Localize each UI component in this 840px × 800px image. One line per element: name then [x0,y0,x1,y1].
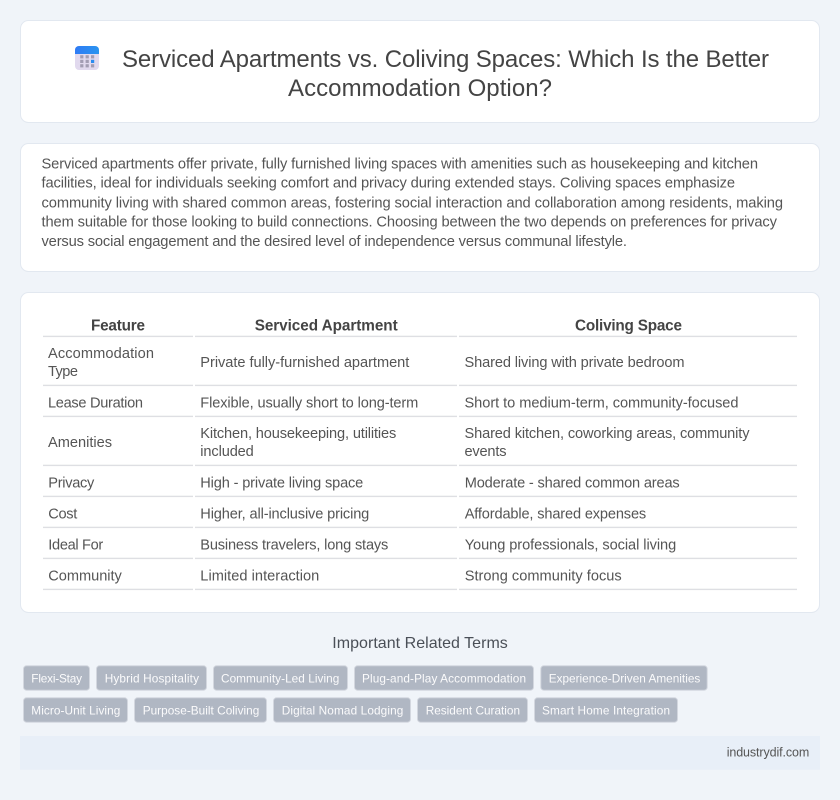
table row: community [43,568,797,590]
tag: Flexi-Stay: Flexi-Stay [31,671,82,685]
title: Serviced Apartments vs. Coliving Spaces: Which Is the Better [122,46,769,73]
footer: industrydif.com [727,746,809,760]
tag: Community-Led Living [214,666,348,690]
icon: calendar [75,46,99,70]
table row: amenities: Amenities [48,435,112,451]
tag: Experience-Driven Amenities [541,666,707,690]
table row: privacy [43,475,797,497]
tag: Hybrid Hospitality: Hybrid Hospitality [105,671,199,685]
table row: amenities: Kitchen, housekeeping, utilities [200,426,396,442]
footer [20,736,820,770]
tag: Resident Curation: Resident Curation [426,703,520,717]
tag: Digital Nomad Lodging [274,698,410,722]
table row: community: Limited interaction [200,568,319,584]
table header row: Feature [91,318,145,335]
text block: summary paragraph: versus social engagement and the desired level of independence versus communal lifestyle. [42,234,627,250]
table row: community: Community [48,568,123,584]
table row: amenities: events [464,444,506,460]
table row: cost: Higher, all-inclusive pricing [200,506,369,522]
tag: Micro-Unit Living [24,698,128,722]
table row: lease duration [43,395,797,417]
tag: Plug-and-Play Accommodation [354,666,534,690]
table row: amenities: Shared kitchen, coworking areas, community [464,426,750,442]
table row: accommodation type [43,346,797,386]
text block: summary paragraph: them suitable for those looking to build connections. Choosing between the two depends on preferences for privacy [42,215,778,231]
title [122,46,769,102]
tag: Smart Home Integration: Smart Home Integration [542,703,670,717]
text block: summary paragraph: facilities, ideal for individuals seeking comfort and privacy during extended stays. Coliving spaces emphasize [42,176,735,192]
table row: ideal for: Ideal For [48,537,103,553]
heading: important related terms: Important Related Terms [332,635,508,652]
tag: Flexi-Stay [24,666,90,690]
table row: privacy: Privacy [48,475,95,491]
text block: summary paragraph: Serviced apartments offer private, fully furnished living spaces with amenities such as housekeeping and kitchen [42,156,758,172]
table row: ideal for: Young professionals, social living [465,537,676,553]
tag: Experience-Driven Amenities: Experience-Driven Amenities [549,671,700,685]
table row: ideal for [43,537,797,559]
table row: lease duration: Short to medium-term, community-focused [464,395,738,411]
table row: accommodation type: Type [48,364,78,380]
table row: accommodation type: Accommodation [48,346,154,362]
text block: summary paragraph [42,156,783,250]
tag: Resident Curation [418,698,528,722]
table header row: Coliving Space [575,318,682,335]
table row: accommodation type: Private fully-furnished apartment [200,355,409,371]
text block: summary paragraph: community living with shared common areas, fostering social interaction and collaboration among residents, making [42,195,783,211]
table row: amenities: included [200,444,254,460]
tag: Purpose-Built Coliving: Purpose-Built Coliving [143,703,259,717]
tag: Smart Home Integration [534,698,678,722]
tag: Community-Led Living: Community-Led Living [221,671,339,685]
panel: introduction [20,144,820,272]
tag: Micro-Unit Living: Micro-Unit Living [31,703,120,717]
table row: privacy: High - private living space [200,475,363,491]
table row: cost [43,506,797,528]
table row: accommodation type: Shared living with private bedroom [464,355,684,371]
table row: cost: Cost [48,506,77,522]
title: Accommodation Option? [288,75,552,102]
table header row: Serviced Apartment [255,318,398,335]
table row: cost: Affordable, shared expenses [465,506,646,522]
panel: comparison table [20,292,820,612]
table row: ideal for: Business travelers, long stays [200,537,388,553]
table row: community: Strong community focus [465,568,622,584]
table header row [43,318,797,337]
panel: title card [20,20,820,122]
tag: Digital Nomad Lodging: Digital Nomad Lodging [282,703,403,717]
table row: lease duration: Flexible, usually short to long-term [200,395,418,411]
tag: Purpose-Built Coliving [134,698,266,722]
table row: privacy: Moderate - shared common areas [465,475,680,491]
tag: Plug-and-Play Accommodation: Plug-and-Play Accommodation [362,671,526,685]
table row: amenities [43,426,797,466]
tag: Hybrid Hospitality [96,666,206,690]
table row: lease duration: Lease Duration [48,395,143,411]
panel: related term tags [24,666,707,722]
